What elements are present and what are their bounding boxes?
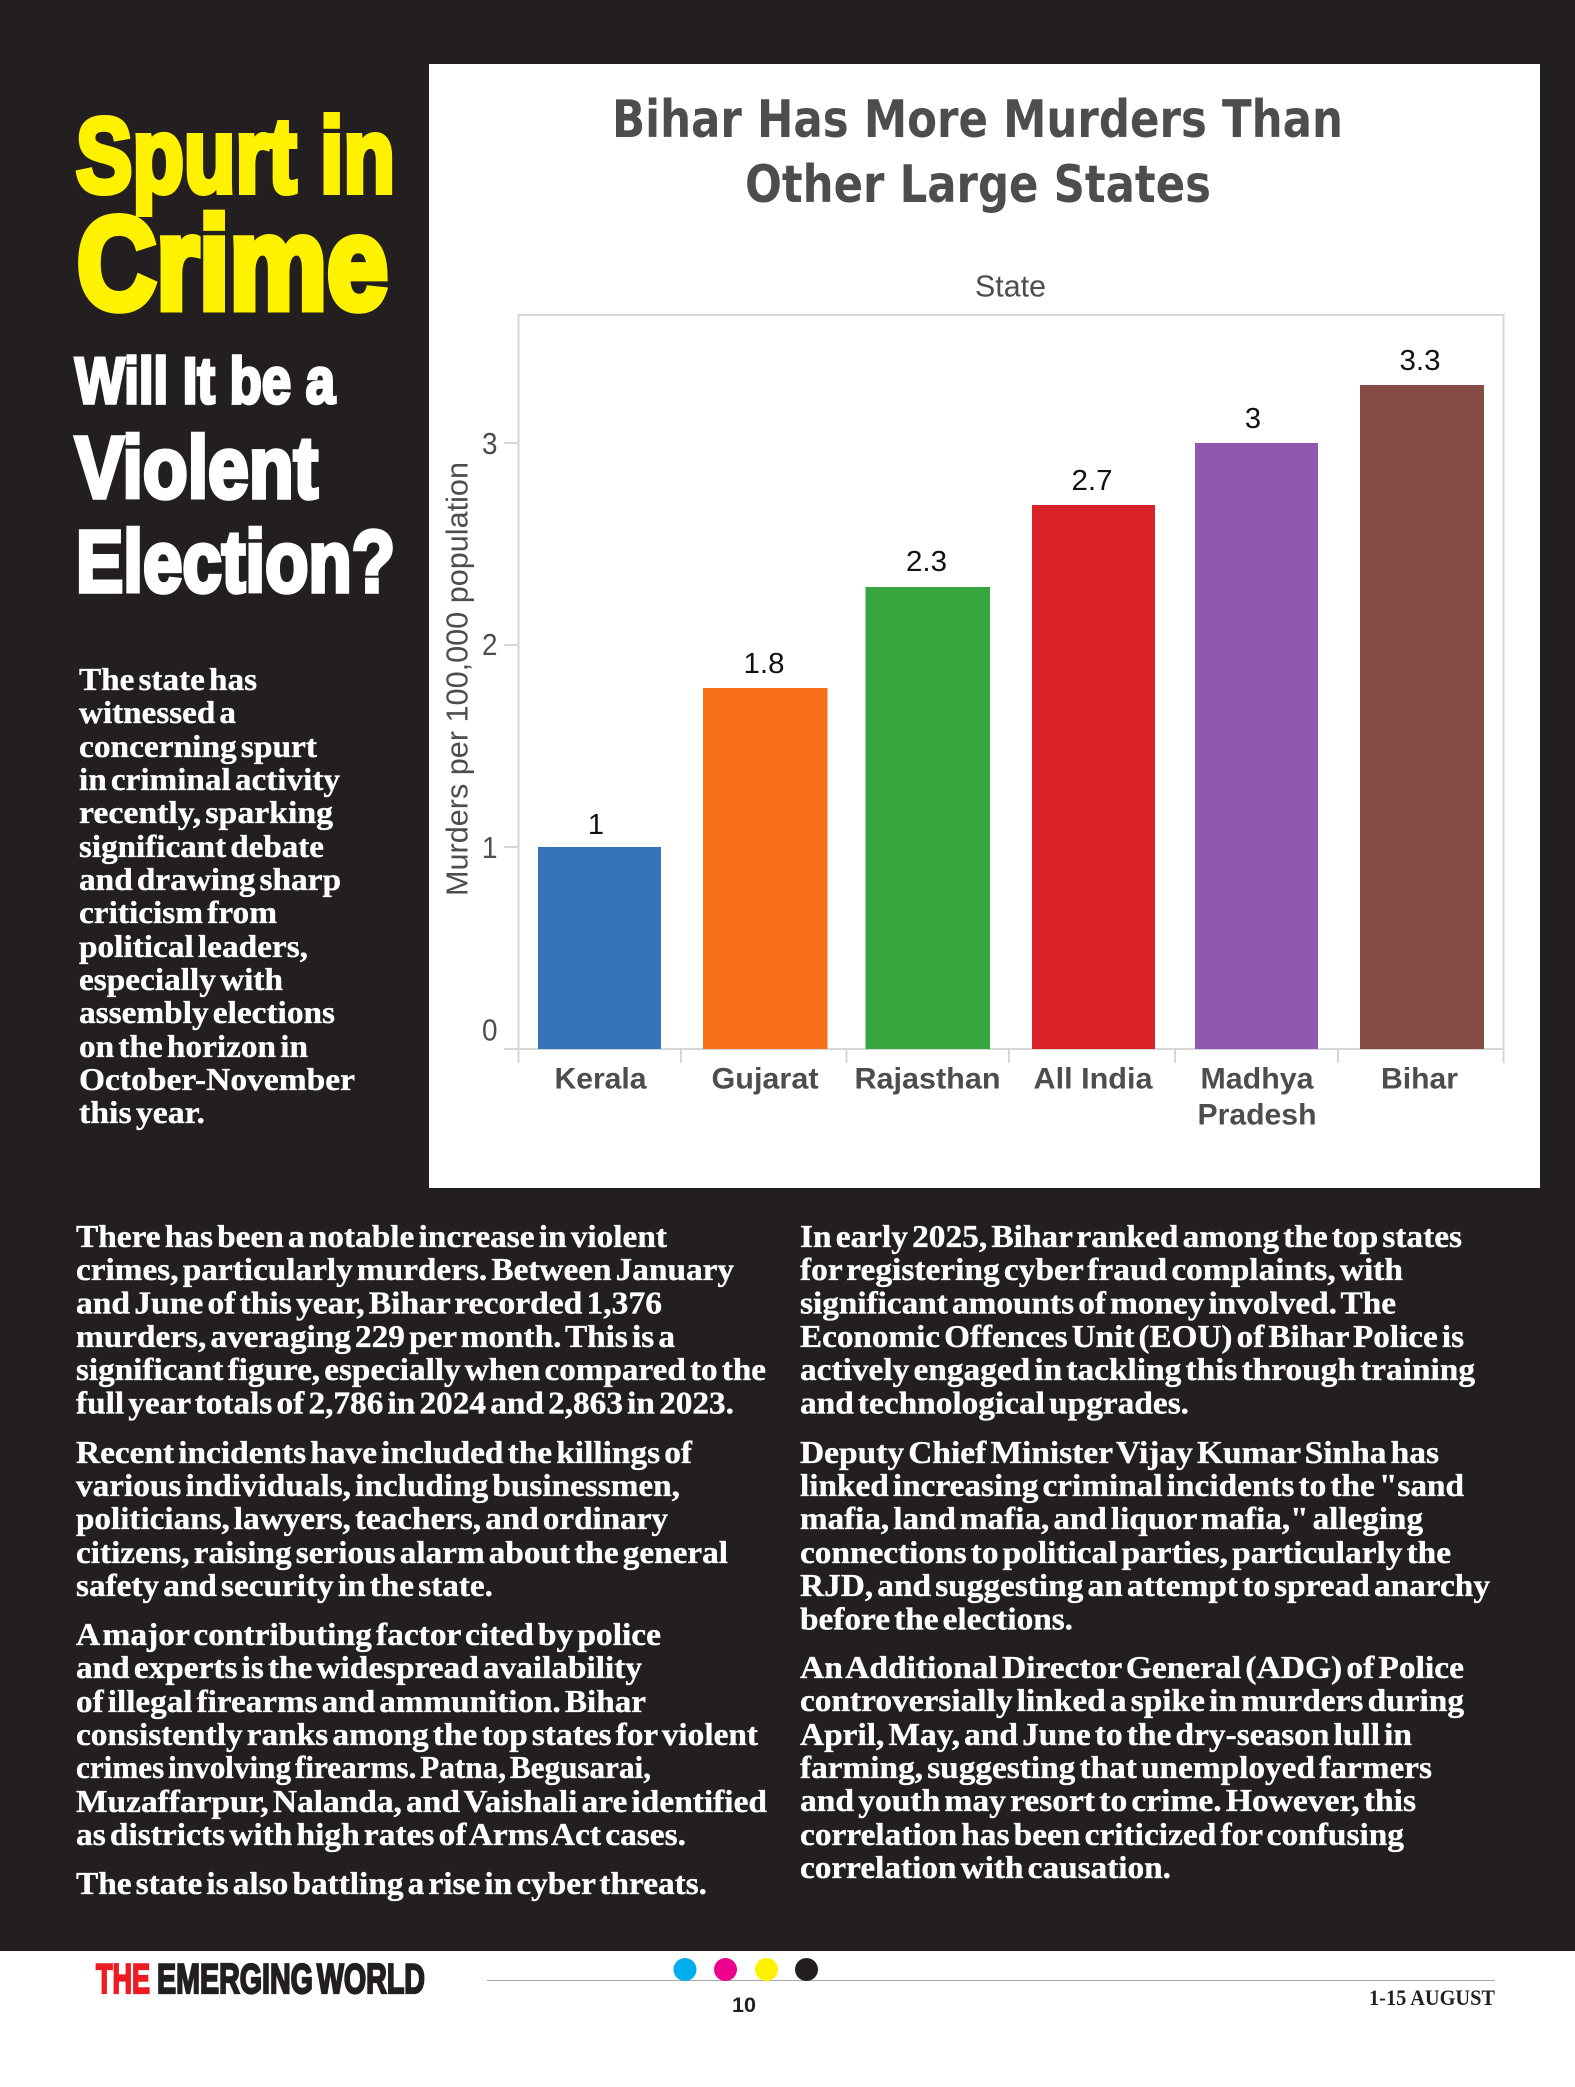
bar: Rajasthan [866, 587, 990, 1049]
paragraph: additional director general: An Additional Director General (ADG) of Police [800, 1649, 1464, 1685]
paragraph: violent crimes: and June of this year, Bihar recorded 1,376 [76, 1284, 662, 1320]
paragraph: recent incidents: safety and security in the state. [76, 1567, 493, 1603]
printer colour dots [674, 1958, 818, 1981]
paragraph: deputy chief minister: before the elections. [800, 1600, 1073, 1636]
paragraph: deputy chief minister: mafia, land mafia, and liquor mafia," alleging [800, 1500, 1423, 1536]
paragraph: deputy chief minister: linked increasing criminal incidents to the "sand [800, 1467, 1464, 1503]
page number: 10 [732, 1994, 756, 2017]
paragraph: illegal firearms: Muzaffarpur, Nalanda, and Vaishali are identified [76, 1783, 767, 1819]
paragraph: illegal firearms: A major contributing factor cited by police [76, 1616, 661, 1652]
x axis category labels: Rajasthan [854, 1062, 1000, 1096]
paragraph: recent incidents: various individuals, including businessmen, [76, 1467, 680, 1503]
intro text block: and drawing sharp [79, 861, 341, 897]
paragraph: recent incidents [76, 1434, 728, 1603]
magazine logo [96, 1955, 425, 2002]
footer [96, 1955, 1495, 2017]
paragraph: additional director general: correlation with causation. [800, 1849, 1171, 1885]
x axis category labels: Kerala [554, 1062, 647, 1096]
bar value labels: 2.3 [906, 546, 947, 578]
paragraph: cyber fraud: and technological upgrades. [800, 1384, 1189, 1420]
intro text block: October-November [79, 1061, 355, 1097]
intro text block: concerning spurt [79, 728, 317, 764]
bar: Gujarat [703, 688, 828, 1049]
issue date: 1-15 AUGUST [1369, 1985, 1495, 2010]
bar: Madhya Pradesh [1195, 443, 1318, 1049]
x axis category labels: Pradesh [1198, 1098, 1316, 1132]
paragraph: recent incidents: citizens, raising serious alarm about the general [76, 1534, 728, 1570]
intro text block: The state has [79, 661, 257, 697]
y axis label: Murders per 100,000 population [440, 462, 474, 896]
intro text block: on the horizon in [79, 1028, 308, 1064]
y axis tick labels: 1 [482, 831, 498, 865]
bar value labels: 3 [1245, 403, 1261, 435]
bar: All India [1032, 505, 1155, 1049]
magazine logo: THE [96, 1955, 150, 2002]
intro text block: this year. [79, 1094, 205, 1130]
paragraph: additional director general: and youth may resort to crime. However, this [800, 1782, 1416, 1818]
paragraph: violent crimes: significant figure, especially when compared to the [76, 1351, 766, 1387]
x axis category labels [554, 1062, 1458, 1132]
chart title: Bihar Has More Murders Than [612, 90, 1343, 150]
paragraph: additional director general: April, May, and June to the dry-season lull in [800, 1716, 1412, 1752]
paragraph: violent crimes [76, 1218, 766, 1420]
paragraph: illegal firearms [76, 1616, 767, 1852]
bar value labels: 3.3 [1400, 345, 1440, 377]
y axis tick labels [482, 427, 498, 1048]
bar value labels: 1.8 [744, 648, 784, 680]
paragraph: recent incidents: Recent incidents have included the killings of [76, 1434, 692, 1470]
paragraph: illegal firearms: consistently ranks among the top states for violent [76, 1716, 758, 1752]
y axis tick labels: 0 [482, 1014, 498, 1048]
paragraph: deputy chief minister: Deputy Chief Minister Vijay Kumar Sinha has [800, 1434, 1439, 1470]
paragraph: cyber threats intro: The state is also battling a rise in cyber threats. [76, 1865, 707, 1901]
x axis category labels: Bihar [1381, 1062, 1458, 1096]
y axis tick labels: 3 [482, 427, 498, 461]
bar: Bihar [1360, 385, 1484, 1049]
subheading line: Will It be a: Will It be a [75, 344, 336, 417]
intro text block: criticism from [79, 894, 277, 930]
heading line: Spurt in: Spurt in [76, 97, 395, 215]
bar value labels: 2.7 [1072, 465, 1112, 497]
intro text block [79, 661, 355, 1130]
paragraph: illegal firearms: crimes involving firearms. Patna, Begusarai, [76, 1749, 651, 1785]
top axis title: State: State [975, 270, 1046, 304]
paragraph: violent crimes: There has been a notable increase in violent [76, 1218, 667, 1254]
paragraph: cyber fraud: for registering cyber fraud complaints, with [800, 1251, 1403, 1287]
intro text block: witnessed a [79, 694, 236, 730]
main heading [75, 97, 395, 610]
intro text block: recently, sparking [79, 794, 333, 830]
paragraph: deputy chief minister: RJD, and suggesting an attempt to spread anarchy [800, 1567, 1490, 1603]
x axis category labels: Madhya [1200, 1062, 1314, 1096]
intro text block: political leaders, [79, 928, 308, 964]
article column: left [76, 1218, 767, 1901]
paragraph: recent incidents: politicians, lawyers, teachers, and ordinary [76, 1500, 668, 1536]
x axis category labels: Gujarat [712, 1062, 819, 1096]
y axis tick labels: 2 [482, 628, 498, 662]
paragraph: violent crimes: murders, averaging 229 per month. This is a [76, 1318, 675, 1354]
intro text block: in criminal activity [79, 761, 340, 797]
subheading line: Violent: Violent [75, 420, 318, 516]
bar value labels: 1 [588, 809, 604, 841]
paragraph: additional director general: farming, suggesting that unemployed farmers [800, 1749, 1432, 1785]
paragraph: cyber fraud: Economic Offences Unit (EOU) of Bihar Police is [800, 1318, 1464, 1354]
footer rule [487, 1980, 1495, 1982]
paragraph: illegal firearms: as districts with high rates of Arms Act cases. [76, 1816, 686, 1852]
article column: right [800, 1218, 1490, 1885]
subheading line: Election?: Election? [76, 514, 395, 610]
paragraph: additional director general: correlation has been criticized for confusing [800, 1816, 1404, 1852]
paragraph: deputy chief minister: connections to political parties, particularly the [800, 1534, 1451, 1570]
heading line: Crime: Crime [77, 190, 388, 336]
intro text block: significant debate [79, 828, 324, 864]
paragraph: illegal firearms: of illegal firearms and ammunition. Bihar [76, 1683, 646, 1719]
paragraph: cyber fraud: significant amounts of money involved. The [800, 1284, 1396, 1320]
paragraph: additional director general [800, 1649, 1464, 1885]
paragraph: cyber fraud [800, 1218, 1475, 1420]
chart title: Other Large States [745, 155, 1211, 215]
bar: Kerala [538, 847, 661, 1049]
panel: bar chart [429, 64, 1540, 1188]
bar value labels [588, 345, 1440, 841]
intro text block: especially with [79, 961, 283, 997]
paragraph: cyber fraud: In early 2025, Bihar ranked among the top states [800, 1218, 1462, 1254]
paragraph: deputy chief minister [800, 1434, 1490, 1636]
paragraph: additional director general: controversially linked a spike in murders during [800, 1682, 1464, 1718]
plot frame and ticks [504, 315, 1504, 1063]
magazine logo: EMERGING WORLD [157, 1955, 425, 2002]
chart title [612, 90, 1343, 215]
paragraph: illegal firearms: and experts is the widespread availability [76, 1649, 642, 1685]
intro text block: assembly elections [79, 994, 335, 1030]
paragraph: violent crimes: crimes, particularly murders. Between January [76, 1251, 734, 1287]
paragraph: violent crimes: full year totals of 2,786 in 2024 and 2,863 in 2023. [76, 1384, 734, 1420]
paragraph: cyber fraud: actively engaged in tackling this through training [800, 1351, 1475, 1387]
x axis category labels: All India [1034, 1062, 1153, 1096]
